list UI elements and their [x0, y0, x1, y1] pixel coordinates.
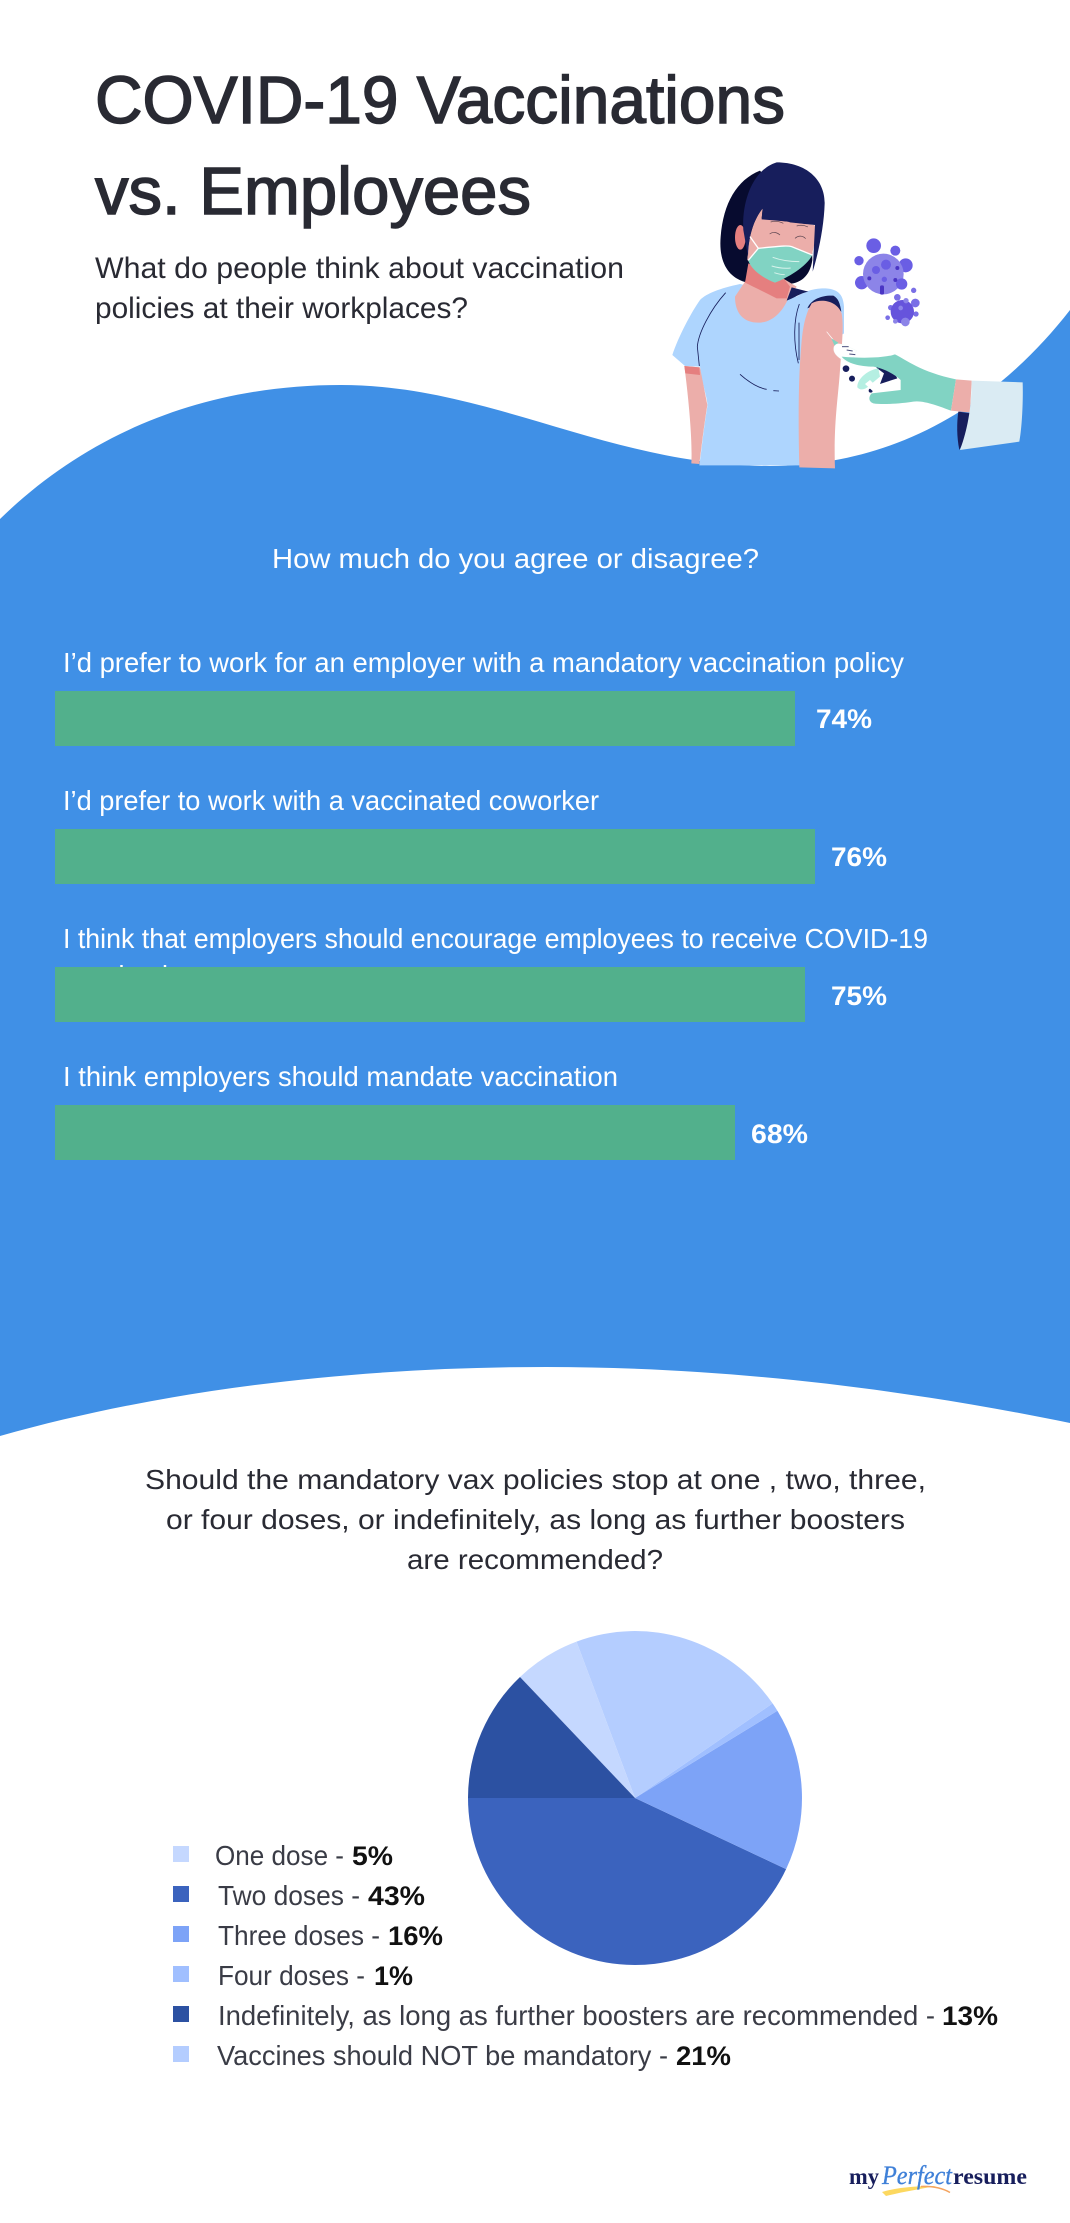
legend item: four doses: 1%	[374, 1961, 413, 1991]
question heading	[145, 1464, 926, 1575]
legend item: indefinitely: Indefinitely, as long as further boosters are recommended -	[218, 2000, 935, 2031]
row: mandatory policy employer	[55, 647, 904, 746]
legend item: two doses	[173, 1880, 425, 1911]
title: COVID-19 Vaccinations	[95, 63, 785, 138]
row: employers should mandate: I think employers should mandate vaccination	[63, 1061, 618, 1092]
logo: myPerfectResume	[849, 2161, 1027, 2196]
icon: small virus	[885, 288, 920, 326]
row: vaccinated coworker	[55, 785, 887, 884]
title	[95, 63, 785, 229]
subtitle: What do people think about vaccination	[95, 252, 624, 285]
icon: large virus	[854, 238, 913, 295]
logo: myPerfectResume: my	[849, 2164, 879, 2189]
row: mandatory policy employer: 74%	[816, 704, 872, 734]
subtitle: policies at their workplaces?	[95, 292, 468, 325]
row: employers should mandate	[55, 1061, 808, 1160]
row: vaccinated coworker: 76%	[831, 842, 887, 872]
legend item: two doses: 43%	[368, 1881, 425, 1911]
row: employers should encourage: vaccination	[63, 960, 198, 991]
subtitle	[95, 252, 624, 325]
logo: myPerfectResume: resume	[953, 2164, 1027, 2189]
legend item: one dose	[173, 1840, 393, 1871]
legend item: one dose: 5%	[352, 1841, 393, 1871]
panel: blue wave background	[0, 310, 1070, 1436]
pie chart: dose preferences	[468, 1631, 802, 1965]
legend item: three doses	[173, 1920, 443, 1951]
legend item: three doses: Three doses -	[218, 1920, 380, 1951]
title: vs. Employees	[95, 154, 531, 229]
legend	[173, 1840, 998, 2071]
question heading: or four doses, or indefinitely, as long as further boosters	[166, 1504, 905, 1535]
icon: syringe and gloved hand	[827, 332, 1023, 450]
bar chart: agreement levels	[55, 647, 928, 1160]
legend item: four doses: Four doses -	[218, 1960, 365, 1991]
heading: agree or disagree: How much do you agree or disagree?	[272, 543, 759, 574]
legend item: not mandatory: Vaccines should NOT be mandatory -	[217, 2040, 668, 2071]
legend item: indefinitely: 13%	[942, 2001, 998, 2031]
row: employers should encourage: I think that employers should encourage employees to receive COVID-19	[63, 923, 928, 954]
legend item: one dose: One dose -	[215, 1840, 344, 1871]
legend item: three doses: 16%	[388, 1921, 443, 1951]
row: employers should mandate: 68%	[751, 1119, 808, 1149]
question heading: Should the mandatory vax policies stop at one , two, three,	[145, 1464, 926, 1495]
illustration: masked woman receiving vaccine	[672, 162, 1023, 468]
legend item: not mandatory: 21%	[676, 2041, 731, 2071]
legend item: four doses	[173, 1960, 413, 1991]
row: mandatory policy employer: I’d prefer to work for an employer with a mandatory vaccination policy	[63, 647, 904, 678]
row: employers should encourage	[55, 923, 928, 1022]
logo: myPerfectResume: Perfect	[881, 2161, 953, 2190]
row: employers should encourage: 75%	[831, 981, 887, 1011]
row: vaccinated coworker: I’d prefer to work with a vaccinated coworker	[63, 785, 599, 816]
question heading: are recommended?	[407, 1544, 663, 1575]
legend item: two doses: Two doses -	[218, 1880, 360, 1911]
